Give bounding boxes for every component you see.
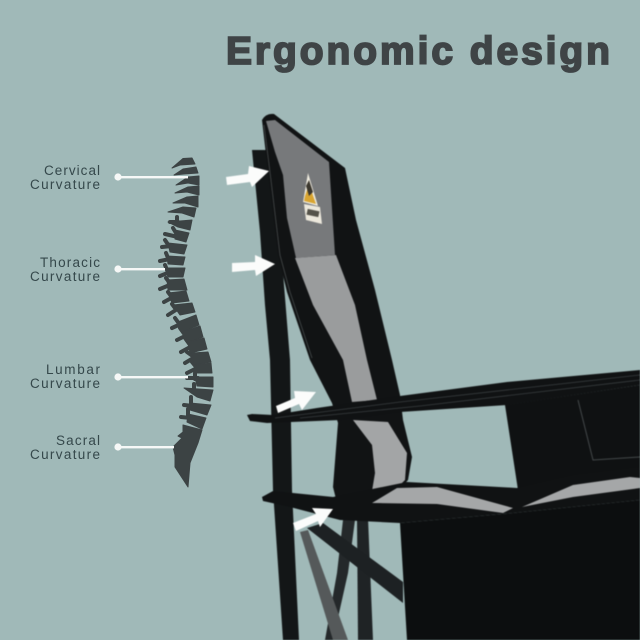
label: thoracic curvature: Thoracic [40, 255, 100, 270]
rear fabric pocket [505, 385, 640, 490]
panel: spine labels [30, 163, 100, 462]
leader: cervical [114, 173, 188, 181]
label: thoracic curvature: Curvature [30, 269, 100, 284]
padded backrest [262, 114, 412, 503]
title: Ergonomic design [226, 30, 610, 73]
label: lumbar curvature: Lumbar [46, 362, 100, 377]
leader: thoracic [114, 265, 165, 273]
label: cervical curvature [30, 163, 100, 192]
label: sacral curvature: Sacral [56, 433, 100, 448]
leader: lumbar [114, 373, 188, 381]
seat [262, 467, 640, 523]
label: sacral curvature [30, 433, 100, 462]
spine illustration [160, 158, 213, 487]
label: thoracic curvature [30, 255, 100, 284]
label: lumbar curvature [30, 362, 100, 391]
label: cervical curvature: Cervical [44, 163, 100, 178]
leader: sacral [114, 443, 174, 451]
label: sacral curvature: Curvature [30, 447, 100, 462]
arrow: headrest [226, 166, 269, 187]
front fabric panel [400, 500, 640, 640]
arrow: upper back [232, 255, 275, 276]
chair photo illustration [226, 114, 640, 640]
leader lines [114, 173, 188, 451]
chair frame legs [252, 150, 403, 640]
arrow: lumbar [276, 391, 316, 413]
logo badge [303, 173, 322, 224]
armrest [247, 370, 640, 423]
label: lumbar curvature: Curvature [30, 376, 100, 391]
arrow: seat [293, 508, 333, 531]
label: cervical curvature: Curvature [30, 177, 100, 192]
